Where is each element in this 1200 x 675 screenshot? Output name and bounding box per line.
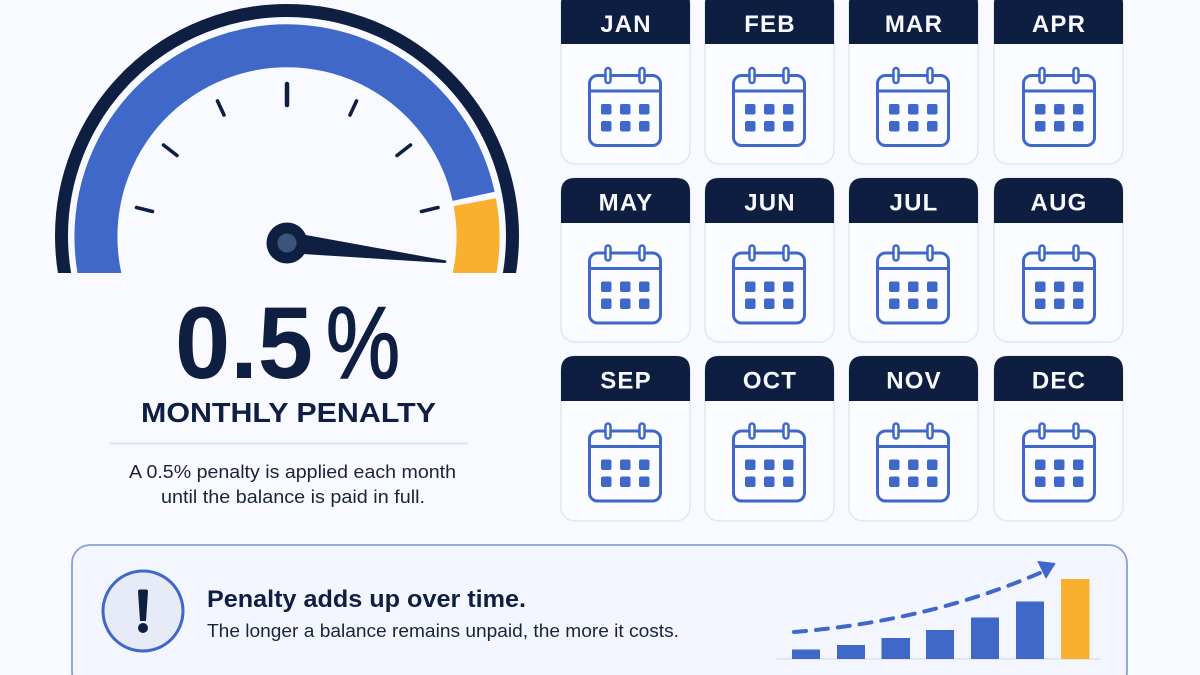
card: SEP [561, 356, 690, 521]
gauge needle [266, 222, 446, 264]
panel: month calendar grid [561, 0, 1123, 521]
description text: until the balance is paid in full. [161, 486, 425, 507]
card: NOV [849, 356, 978, 521]
gauge blue zone [96, 46, 474, 300]
card: FEB: FEB [744, 11, 796, 38]
big figure: 0.5 [175, 286, 313, 400]
big figure [175, 286, 400, 400]
card: MAY: MAY [599, 190, 653, 216]
card: AUG [994, 178, 1123, 342]
card: JUL: JUL [890, 190, 938, 216]
icon: alert [103, 571, 183, 651]
card: JUN: JUN [744, 190, 796, 216]
description text: A 0.5% penalty is applied each month [129, 461, 456, 482]
description text [129, 461, 456, 507]
card: APR: APR [1032, 11, 1086, 38]
arrow: rising trend [794, 562, 1055, 632]
card: NOV: NOV [886, 368, 942, 394]
card: FEB [705, 0, 834, 164]
card: JAN: JAN [600, 11, 652, 38]
card: DEC [994, 356, 1123, 521]
card: MAR [849, 0, 978, 164]
card: MAY [561, 178, 690, 342]
panel: callout [72, 545, 1127, 675]
card: DEC: DEC [1032, 368, 1086, 394]
card: SEP: SEP [600, 368, 652, 394]
card: OCT: OCT [743, 368, 797, 394]
card: JUN [705, 178, 834, 342]
card: JAN [561, 0, 690, 164]
gauge tick marks [136, 84, 438, 212]
gauge outer ring [55, 4, 519, 273]
gauge amber zone [467, 202, 478, 300]
callout box [72, 545, 1127, 675]
card: OCT [705, 356, 834, 521]
card: AUG: AUG [1031, 190, 1087, 216]
big figure: % [326, 286, 400, 400]
card: MAR: MAR [885, 11, 943, 38]
subtitle: MONTHLY PENALTY [141, 397, 436, 428]
callout heading: Penalty adds up over time. [207, 586, 526, 613]
gauge [55, 4, 519, 273]
bar chart [776, 579, 1100, 659]
callout text: The longer a balance remains unpaid, the more it costs. [207, 621, 679, 641]
card: APR [994, 0, 1123, 164]
card: JUL [849, 178, 978, 342]
